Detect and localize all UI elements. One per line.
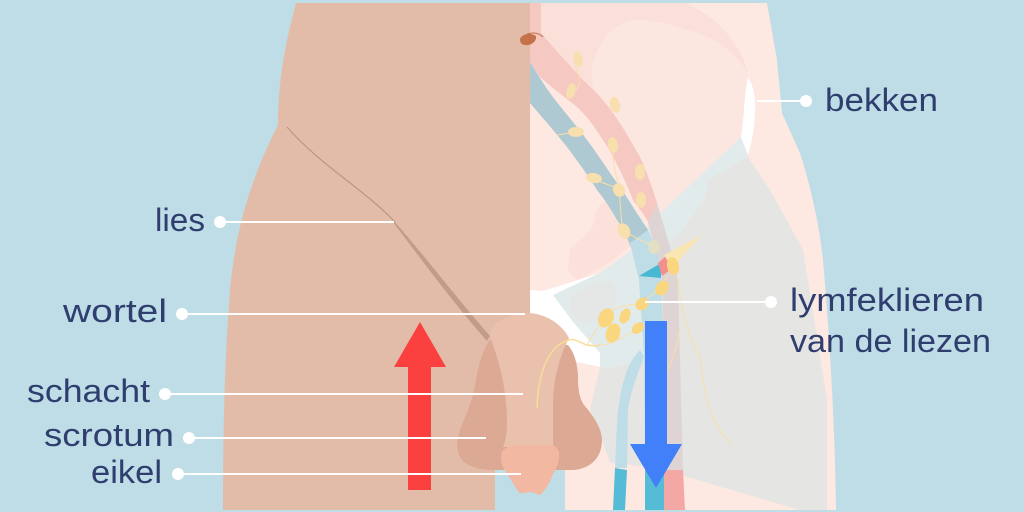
navel hook — [527, 33, 543, 37]
label: wortel: wortel — [62, 293, 167, 329]
label: schacht: schacht — [27, 373, 150, 409]
label: bekken — [757, 82, 938, 118]
pelvis bone shade — [541, 3, 748, 87]
small teal triangle — [639, 263, 661, 278]
label: schacht — [27, 373, 523, 409]
label: eikel: eikel — [91, 454, 162, 490]
label: wortel — [62, 293, 525, 329]
pelvis white gap — [741, 77, 755, 155]
penis and scrotum — [457, 313, 602, 495]
label: lies: lies — [155, 202, 205, 238]
saphenous teal lower — [613, 468, 627, 510]
artery upper — [530, 3, 665, 232]
groin crease — [393, 220, 490, 341]
vein upper — [530, 62, 648, 250]
artery lower overlay — [648, 203, 683, 470]
body: right half transparent anatomy — [530, 3, 836, 510]
small red shape — [658, 255, 670, 276]
thigh grey — [590, 157, 827, 510]
label: lymfeklieren van de liezen: lymfeklieren — [790, 282, 984, 318]
yellow ligament spike — [664, 235, 702, 268]
vein branch — [615, 350, 644, 468]
right half silhouette — [530, 3, 836, 510]
label: eikel — [91, 454, 521, 490]
vessel on shaft — [537, 340, 600, 408]
blue down arrow — [630, 321, 682, 488]
label: lies — [155, 202, 394, 238]
lymph vessels — [557, 65, 733, 446]
glans — [501, 445, 559, 495]
label: bekken: bekken — [825, 82, 938, 118]
label: scrotum: scrotum — [44, 417, 174, 453]
vein lower — [630, 230, 664, 470]
pubic ramus shade — [568, 200, 632, 280]
leg gap — [495, 468, 565, 510]
artery bottom section — [662, 470, 685, 510]
lymph nodes lower — [595, 256, 680, 345]
label: lymfeklieren van de liezen — [645, 282, 991, 359]
navel — [520, 34, 536, 45]
pubic white gap — [530, 273, 600, 367]
groin line — [287, 127, 395, 222]
body: left half skin — [223, 3, 530, 510]
pelvis inner area — [592, 20, 748, 223]
thigh light-blue overlay — [553, 137, 748, 368]
shaft — [490, 313, 569, 447]
red up arrow — [394, 322, 446, 490]
label: lymfeklieren van de liezen: van de liezen — [790, 323, 991, 359]
label: scrotum — [44, 417, 486, 453]
femoral vein teal lower — [645, 470, 664, 510]
lymph nodes upper — [565, 50, 660, 254]
thigh inner grey blob — [570, 281, 616, 322]
scrotum — [457, 340, 602, 470]
